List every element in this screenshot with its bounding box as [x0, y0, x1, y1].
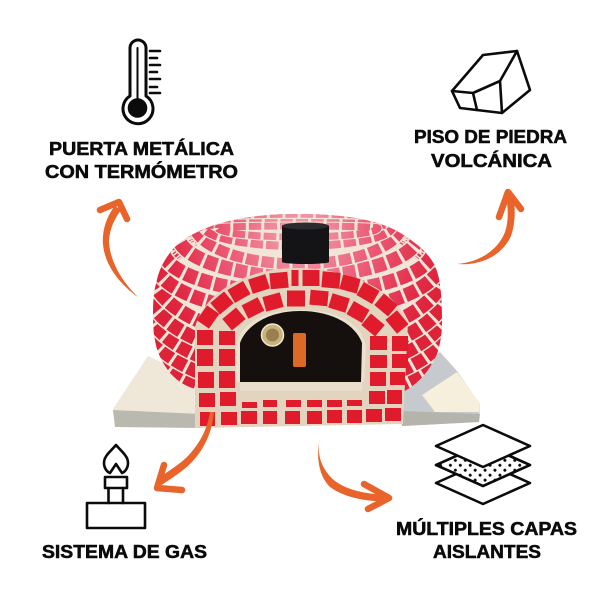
heading: puerta metálica: PUERTA METÁLICA [49, 138, 234, 159]
heading: múltiples capas [396, 518, 577, 562]
heading: piso de piedra: VOLCÁNICA [431, 150, 552, 171]
chimney [282, 222, 329, 264]
icon: gas burner [87, 445, 145, 528]
arrow: to thermometer [100, 202, 138, 297]
heading: puerta metálica: CON TERMÓMETRO [45, 161, 238, 182]
heading: piso de piedra [414, 127, 567, 171]
door thermometer gauge [262, 324, 284, 346]
arrow: to gas burner [156, 412, 214, 490]
stone base slab [113, 352, 480, 428]
oven front arch [195, 268, 409, 428]
oven door [236, 310, 366, 391]
heading: puerta metálica [45, 138, 238, 182]
heading: múltiples capas: AISLANTES [433, 542, 541, 562]
infographic: oven features [42, 38, 576, 558]
heading: piso de piedra: PISO DE PIEDRA [414, 127, 567, 147]
icon: insulation layers [436, 425, 530, 504]
icon: thermometer [123, 40, 160, 124]
arrow: to stone [457, 192, 521, 264]
heading: sistema de gas: SISTEMA DE GAS [42, 542, 207, 562]
icon: volcanic stone [452, 51, 530, 113]
door handle [293, 333, 306, 367]
heading: múltiples capas: MÚLTIPLES CAPAS [396, 518, 577, 539]
arrow: to layers [318, 437, 389, 509]
mosaic dome [153, 214, 442, 391]
front mosaic tiles [197, 270, 409, 426]
